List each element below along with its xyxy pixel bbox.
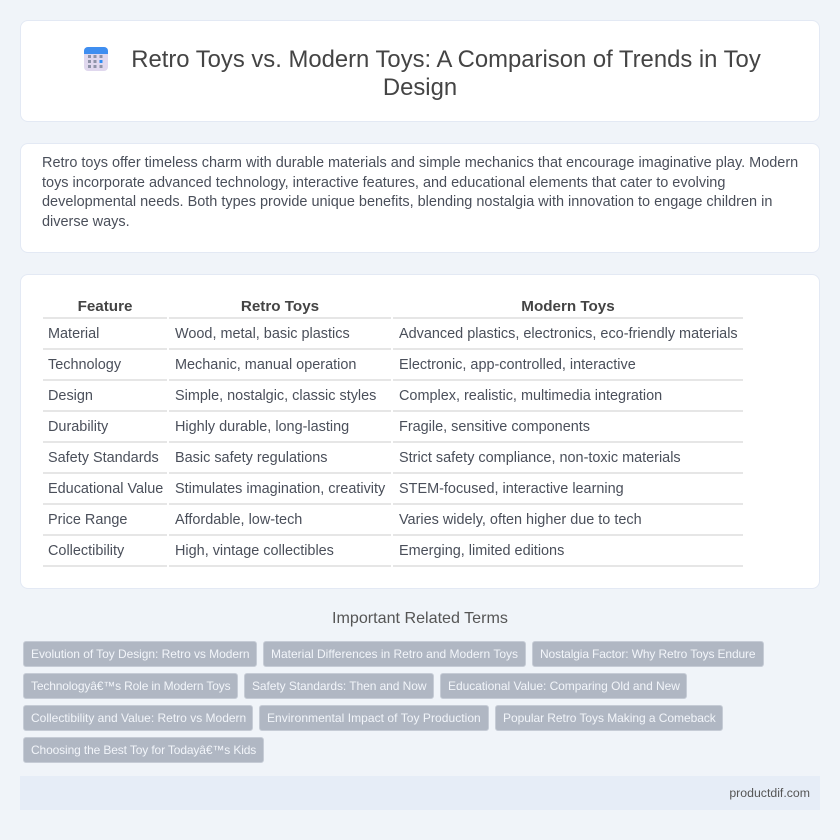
icon: calendar bbox=[84, 47, 108, 71]
title: Retro Toys vs. Modern Toys: A Comparison of Trends in Toy bbox=[131, 46, 761, 73]
title: Design bbox=[383, 74, 457, 101]
comparison table: Fragile, sensitive components bbox=[399, 419, 590, 435]
tag list: Educational Value: Comparing Old and New bbox=[448, 679, 680, 693]
panel: comparison table bbox=[20, 274, 820, 589]
text: introduction paragraph bbox=[42, 155, 798, 230]
tag list: Safety Standards: Then and Now bbox=[252, 679, 426, 693]
comparison table: Stimulates imagination, creativity bbox=[175, 481, 385, 497]
heading: important related terms: Important Related Terms bbox=[332, 609, 508, 627]
comparison table: Collectibility bbox=[48, 543, 124, 559]
comparison table: Advanced plastics, electronics, eco-friendly materials bbox=[399, 326, 738, 342]
comparison table: Highly durable, long-lasting bbox=[175, 419, 349, 435]
comparison table: Safety Standards bbox=[48, 450, 159, 466]
comparison table: Affordable, low-tech bbox=[175, 512, 302, 528]
comparison table: Design bbox=[48, 388, 93, 404]
comparison table: Basic safety regulations bbox=[175, 450, 327, 466]
comparison table: Durability bbox=[48, 419, 108, 435]
tag list: Nostalgia Factor: Why Retro Toys Endure bbox=[540, 647, 755, 661]
text: site name: productdif.com bbox=[729, 786, 810, 800]
comparison table: Complex, realistic, multimedia integration bbox=[399, 388, 662, 404]
comparison table: Strict safety compliance, non-toxic materials bbox=[399, 450, 681, 466]
panel: introduction bbox=[20, 143, 820, 253]
comparison table: Material bbox=[48, 326, 99, 342]
comparison table: Mechanic, manual operation bbox=[175, 357, 356, 373]
comparison table: Price Range bbox=[48, 512, 127, 528]
comparison table: Emerging, limited editions bbox=[399, 543, 564, 559]
comparison table: Simple, nostalgic, classic styles bbox=[175, 388, 376, 404]
table header bbox=[43, 298, 743, 319]
comparison table: STEM-focused, interactive learning bbox=[399, 481, 624, 497]
text: introduction paragraph: diverse ways. bbox=[42, 214, 130, 230]
tag list: Collectibility and Value: Retro vs Modern bbox=[31, 711, 246, 725]
comparison table: Wood, metal, basic plastics bbox=[175, 326, 350, 342]
table header: Modern Toys bbox=[521, 298, 615, 315]
comparison table: High, vintage collectibles bbox=[175, 543, 334, 559]
text: introduction paragraph: toys incorporate advanced technology, interactive features, and educational elements that cater to evolving bbox=[42, 175, 725, 191]
footer bbox=[20, 776, 820, 810]
tag list: Technologyâ€™s Role in Modern Toys bbox=[31, 679, 230, 693]
text: introduction paragraph: developmental needs. Both types provide unique benefits, blending nostalgia with innovation to engage children in bbox=[42, 194, 772, 210]
tag list: Popular Retro Toys Making a Comeback bbox=[503, 711, 716, 725]
comparison table: Varies widely, often higher due to tech bbox=[399, 512, 642, 528]
tag list: Material Differences in Retro and Modern Toys bbox=[271, 647, 518, 661]
tag list: Environmental Impact of Toy Production bbox=[267, 711, 481, 725]
tag list bbox=[23, 641, 764, 763]
table header: Feature bbox=[78, 298, 132, 315]
tag list: Evolution of Toy Design: Retro vs Modern bbox=[31, 647, 250, 661]
comparison table: Educational Value bbox=[48, 481, 163, 497]
title bbox=[131, 46, 761, 101]
text: introduction paragraph: Retro toys offer timeless charm with durable materials and simple mechanics that encourage imaginative play. Modern bbox=[42, 155, 798, 171]
panel: header bbox=[20, 20, 820, 122]
comparison table: Technology bbox=[48, 357, 121, 373]
comparison table: Electronic, app-controlled, interactive bbox=[399, 357, 636, 373]
table header: Retro Toys bbox=[241, 298, 319, 315]
tag list: Choosing the Best Toy for Todayâ€™s Kids bbox=[31, 743, 256, 757]
